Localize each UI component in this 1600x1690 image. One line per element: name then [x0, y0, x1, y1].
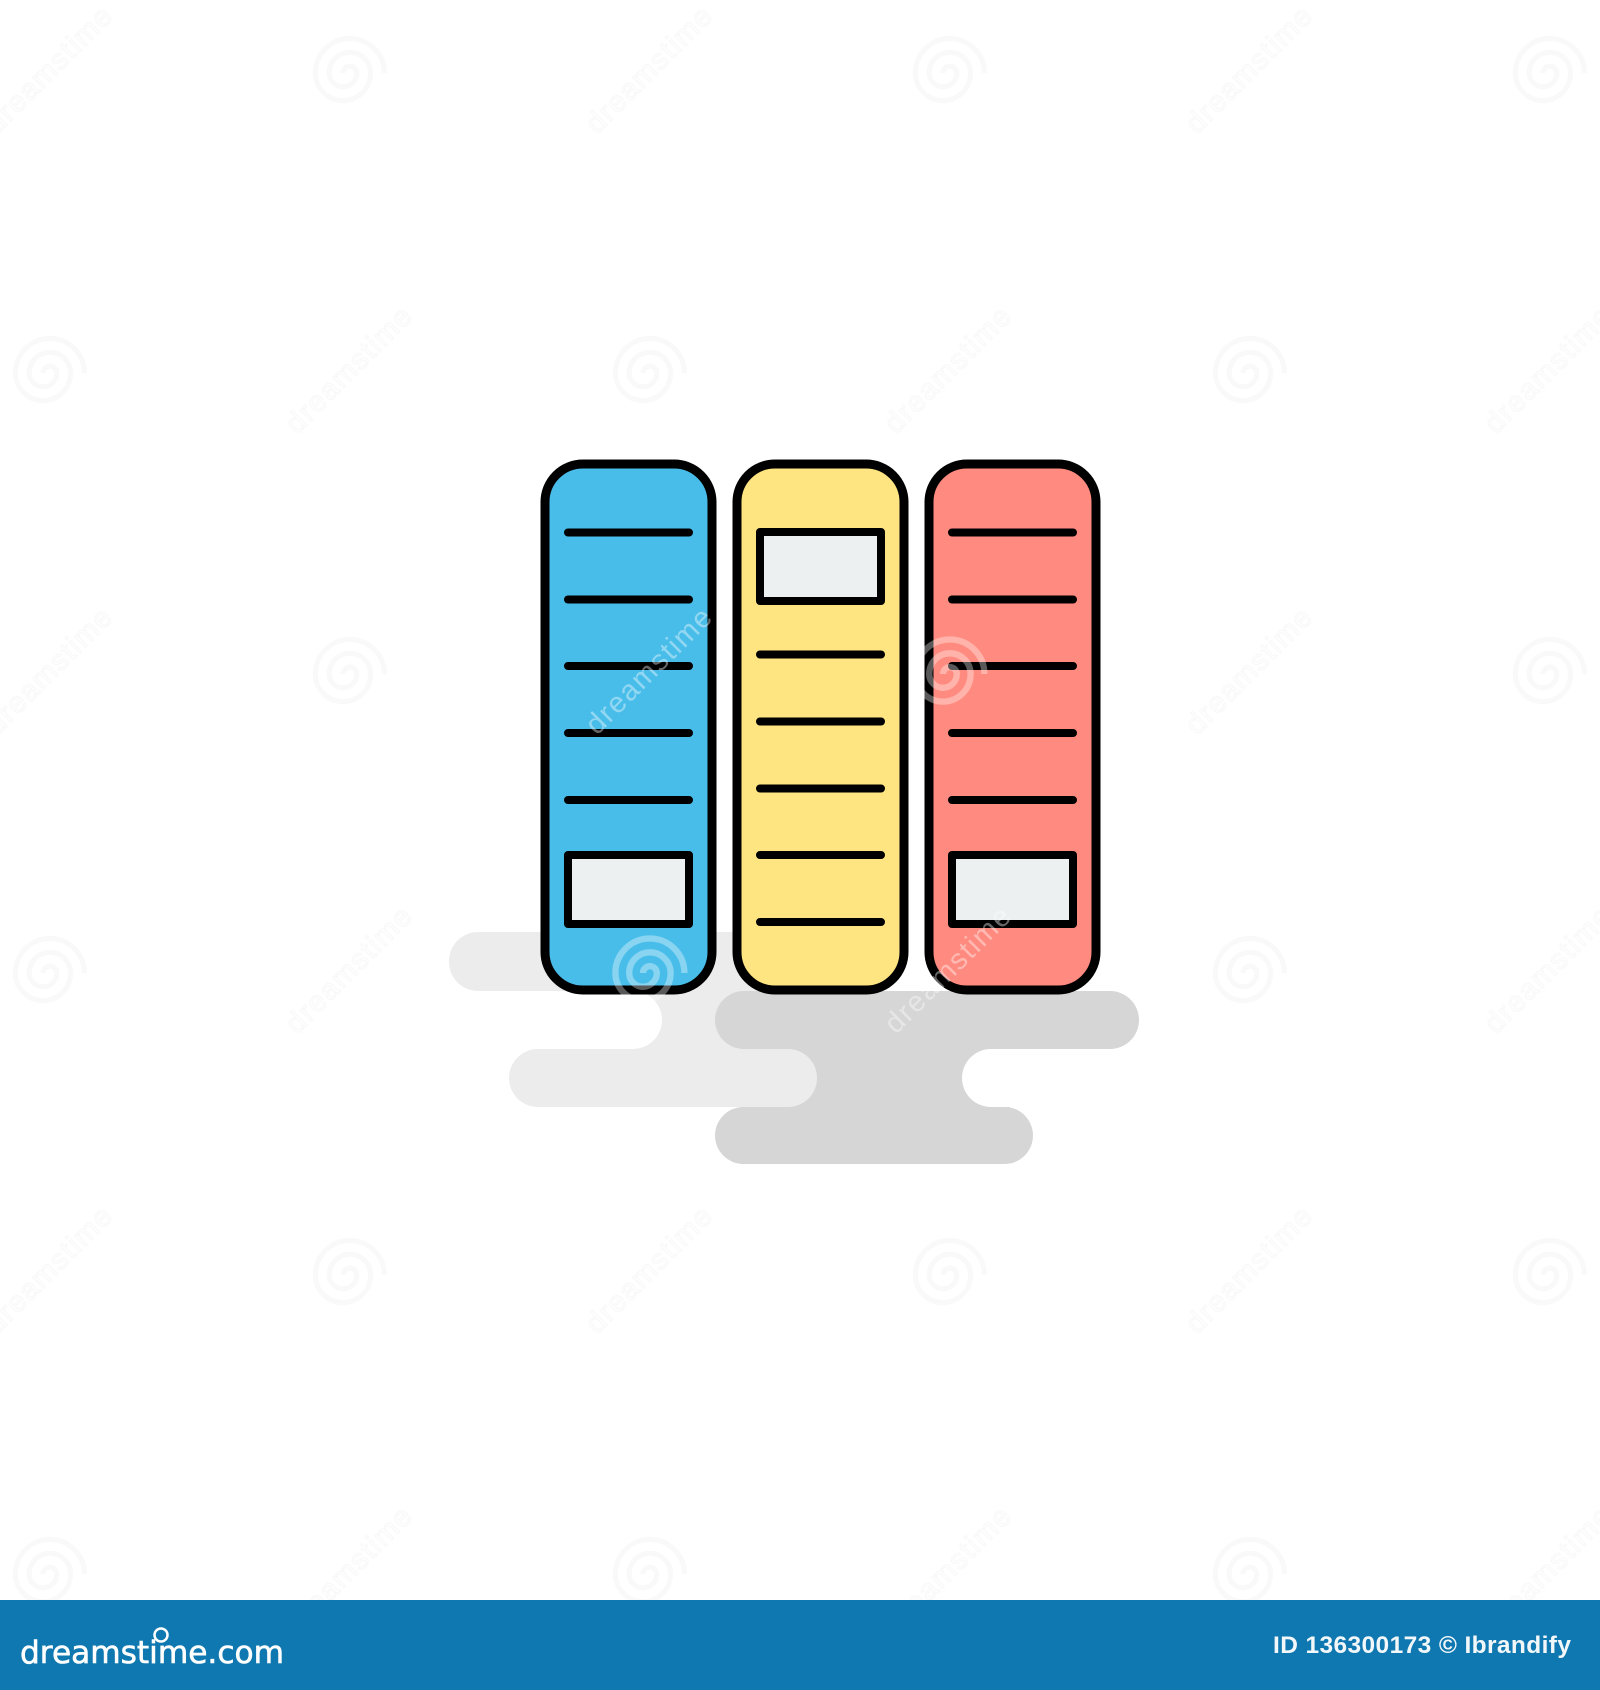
footer bar — [0, 1600, 1600, 1690]
watermark pattern on white: dreamstime — [1179, 1201, 1319, 1340]
ground shape: light cloud — [400, 932, 789, 1055]
ground shape: dark cloud — [715, 991, 1202, 1164]
watermark pattern on white: dreamstime — [579, 1201, 719, 1340]
binder: red — [929, 464, 1096, 990]
watermark pattern on white: dreamstime — [878, 301, 1018, 440]
yellow binder label — [760, 532, 881, 601]
watermark pattern on white: dreamstime — [279, 901, 419, 1040]
watermark pattern on white: dreamstime — [878, 1501, 1018, 1640]
binder: yellow — [737, 464, 904, 990]
watermark pattern on white: dreamstime — [279, 1501, 419, 1640]
watermark pattern on white: dreamstime — [279, 301, 419, 440]
footer logo: dreamstime.com — [20, 1635, 284, 1671]
watermark over binders — [579, 602, 1018, 1040]
watermark over binders: dreamstime — [878, 901, 1018, 1040]
image id and credit: ID 136300173 © Ibrandify — [1273, 1632, 1571, 1659]
ground shape: light pill over dark cloud — [509, 1049, 817, 1107]
red binder label — [952, 855, 1073, 924]
watermark pattern on white: dreamstime — [579, 1, 719, 140]
watermark pattern on white: dreamstime — [1179, 602, 1319, 741]
blue binder label — [568, 855, 689, 924]
binder: blue — [545, 464, 712, 990]
watermark pattern on white: dreamstime — [1179, 1, 1319, 140]
logo spiral — [154, 1628, 168, 1642]
watermark over binders: dreamstime — [579, 602, 719, 741]
